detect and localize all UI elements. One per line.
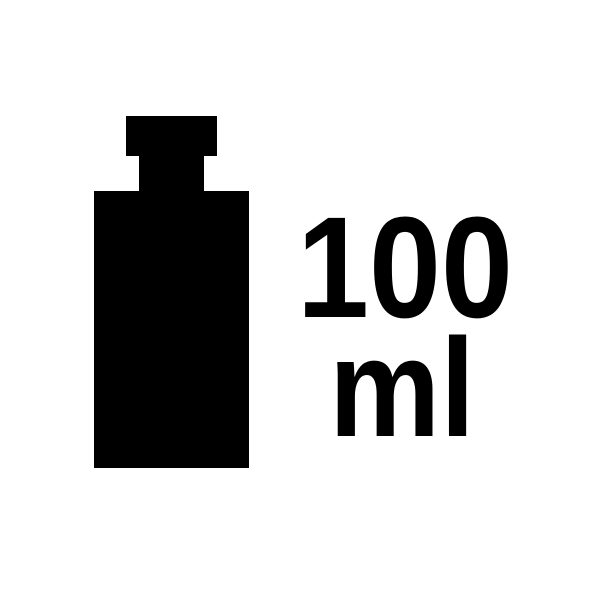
volume label (297, 187, 513, 466)
volume label: 100 (297, 187, 513, 348)
icon: bottle (94, 116, 249, 468)
volume label: ml (329, 309, 475, 466)
